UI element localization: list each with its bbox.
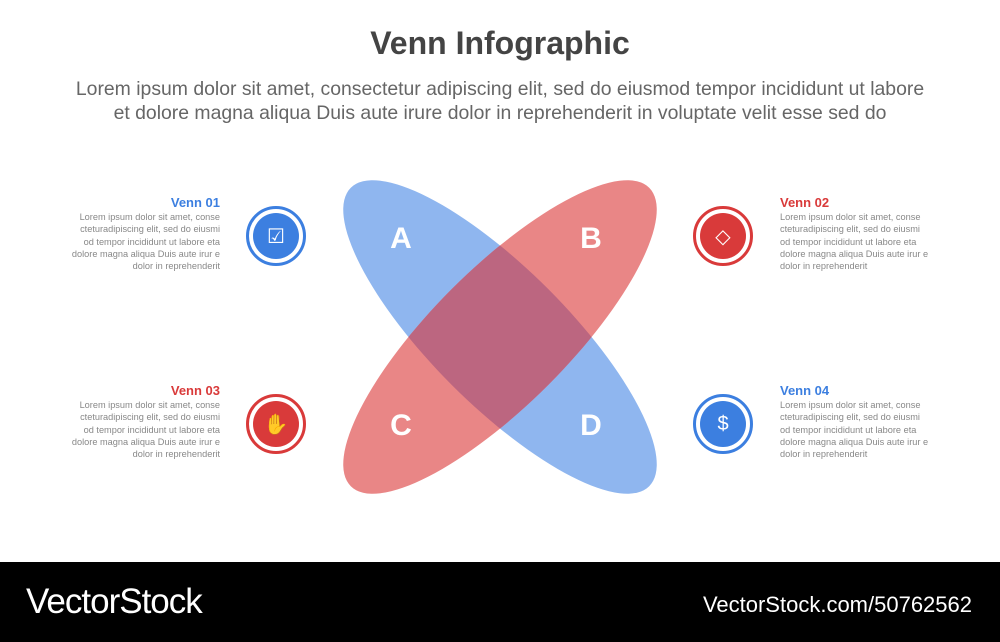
text: venn 03: Venn 03 — [171, 383, 220, 398]
icon: clipboard — [246, 206, 306, 266]
footer: VectorStock.com/50762562 — [703, 592, 972, 617]
text: venn 02: Lorem ipsum dolor sit amet, conse cteturadipiscing elit, sed do eiusmi od tempor incididunt ut labore eta dolore magna aliqua Duis aute irur e dolor in reprehenderit — [780, 212, 928, 271]
icon: idea hand: ✋ — [264, 414, 288, 436]
text: venn 03: Lorem ipsum dolor sit amet, conse cteturadipiscing elit, sed do eiusmi od tempor incididunt ut labore eta dolore magna aliqua Duis aute irur e dolor in reprehenderit — [72, 400, 220, 459]
subtitle: Lorem ipsum dolor sit amet, consectetur adipiscing elit, sed do eiusmod tempor incididunt ut labore — [76, 78, 924, 100]
icon: shapes: ◇ — [715, 226, 731, 248]
text: venn 01: Venn 01 — [171, 195, 220, 210]
icon: shapes — [693, 206, 753, 266]
footer — [0, 562, 1000, 642]
subtitle — [76, 78, 924, 124]
text: venn 04: Lorem ipsum dolor sit amet, conse cteturadipiscing elit, sed do eiusmi od tempor incididunt ut labore eta dolore magna aliqua Duis aute irur e dolor in reprehenderit — [780, 400, 928, 459]
venn diagram — [343, 180, 657, 494]
venn diagram: B — [580, 222, 602, 255]
text: venn 02: Venn 02 — [780, 195, 829, 210]
icon: clipboard: ☑ — [267, 226, 285, 248]
title: Venn Infographic — [370, 25, 630, 61]
venn diagram: A — [390, 222, 412, 255]
icon: globe money — [693, 394, 753, 454]
venn diagram: D — [580, 409, 602, 442]
text: venn 04: Venn 04 — [780, 383, 829, 398]
footer: VectorStock — [26, 582, 202, 621]
subtitle: et dolore magna aliqua Duis aute irure dolor in reprehenderit in voluptate velit esse sed do — [114, 102, 886, 124]
icon: globe money: $ — [717, 412, 729, 434]
venn diagram: C — [390, 409, 412, 442]
icon: idea hand — [246, 394, 306, 454]
text: venn 01: Lorem ipsum dolor sit amet, conse cteturadipiscing elit, sed do eiusmi od tempor incididunt ut labore eta dolore magna aliqua Duis aute irur e dolor in reprehenderit — [72, 212, 220, 271]
